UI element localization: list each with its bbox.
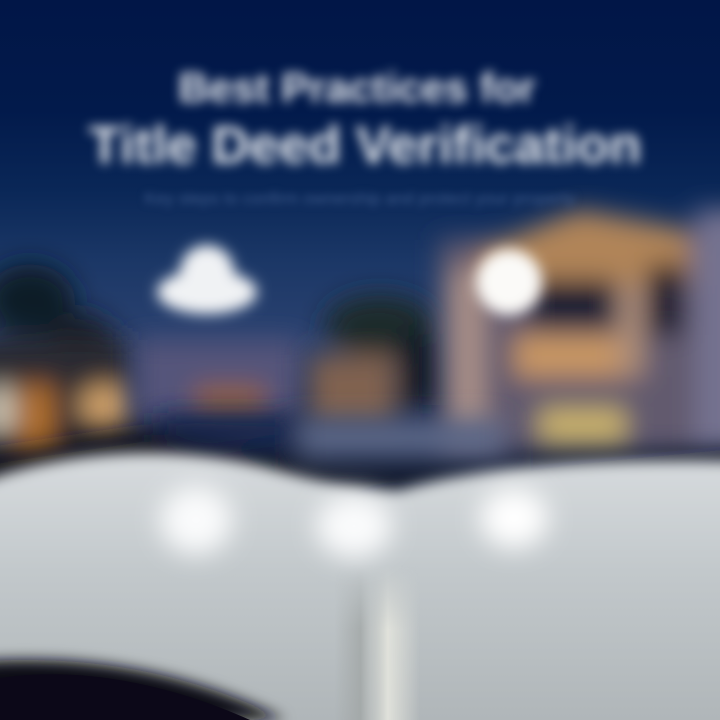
subtitle: Key steps to confirm ownership and protect your property bbox=[145, 189, 575, 208]
open book bbox=[0, 453, 720, 720]
book spine shading bbox=[343, 582, 414, 720]
book glow icons bbox=[160, 486, 548, 558]
title line 1: Best Practices for bbox=[178, 64, 536, 111]
background scene: houses, trees, moon and open book bbox=[0, 192, 720, 720]
white cloud icon bbox=[157, 245, 257, 314]
pool / dark ledge bbox=[0, 415, 720, 490]
right large house bbox=[440, 210, 720, 450]
dark foreground corner bbox=[0, 660, 285, 720]
middle distant houses bbox=[135, 340, 300, 420]
title line 2: Title Deed Verification bbox=[89, 116, 641, 175]
glowing circle icon on house bbox=[476, 249, 542, 315]
left trees and house bbox=[0, 264, 131, 465]
center house and tree bbox=[310, 295, 440, 425]
